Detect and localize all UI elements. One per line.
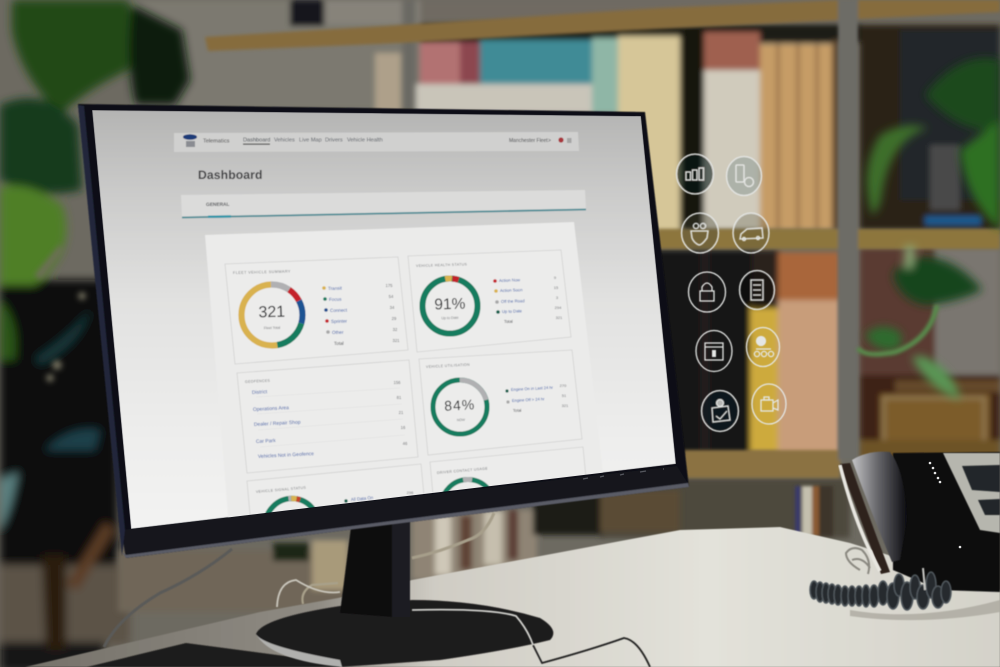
card: geofences: 21 bbox=[399, 410, 404, 415]
legend: 34 bbox=[390, 305, 395, 310]
background: plant specks bbox=[35, 245, 86, 382]
card: vehicle signal status: 296 bbox=[407, 490, 414, 495]
legend: Action Now bbox=[499, 277, 521, 283]
monitor screen: dashboard bbox=[92, 110, 676, 529]
legend: 3 bbox=[556, 295, 559, 300]
card: driver behaviour score: DRIVER CONTACT USAGE bbox=[437, 467, 488, 475]
legend: 321 bbox=[556, 315, 563, 320]
legend: Engine Off > 24 hr bbox=[512, 396, 545, 403]
donut chart: 91% up to date bbox=[422, 278, 478, 334]
legend: 175 bbox=[386, 283, 393, 288]
icon: video camera bbox=[752, 384, 786, 424]
icon: calendar bbox=[696, 330, 732, 372]
legend bbox=[505, 383, 569, 413]
tab bar bbox=[181, 190, 586, 218]
card: driver behaviour score bbox=[430, 446, 586, 493]
legend: Off the Road bbox=[501, 298, 525, 304]
card: vehicle health status: Up to Date bbox=[441, 316, 459, 320]
legend: Total bbox=[513, 408, 522, 413]
card: geofences: 16 bbox=[401, 425, 406, 430]
card: vehicle utilisation bbox=[419, 350, 582, 455]
background: lower wall and items behind the monitor bbox=[118, 490, 680, 612]
floating feature icons bbox=[676, 154, 786, 432]
navigation bar: Dashboard bbox=[243, 138, 270, 144]
legend: Focus bbox=[329, 297, 342, 302]
donut chart: 84% now bbox=[433, 380, 487, 434]
card: vehicle health status: 91% bbox=[434, 296, 466, 313]
navigation bar: Vehicle Health bbox=[347, 138, 383, 144]
icon: lock bbox=[688, 272, 726, 312]
navigation bar: Manchester Fleet bbox=[509, 138, 548, 144]
Ford logo bbox=[183, 134, 197, 140]
legend: 15 bbox=[554, 285, 559, 290]
legend: 294 bbox=[555, 305, 562, 310]
donut chart: 321 fleet total bbox=[242, 284, 302, 346]
legend bbox=[322, 283, 400, 346]
icon: driver badge bbox=[682, 213, 718, 253]
monitor buttons bbox=[583, 469, 664, 479]
cables bbox=[104, 513, 650, 667]
card: geofences: 81 bbox=[397, 395, 402, 400]
card: fleet vehicle summary: 321 bbox=[258, 304, 286, 321]
legend: Other bbox=[332, 330, 344, 335]
legend: Up to Date bbox=[502, 308, 523, 314]
background: plant on the right bbox=[865, 58, 1000, 400]
navigation bar: Vehicles bbox=[274, 138, 295, 144]
card: vehicle health status: VEHICLE HEALTH STATUS bbox=[416, 262, 468, 268]
icon: bar chart bbox=[676, 154, 714, 194]
heading: Dashboard bbox=[198, 168, 263, 182]
card: geofences: Operations Area bbox=[253, 405, 289, 413]
donut chart: driver bbox=[442, 476, 490, 492]
background: plant on the left bbox=[0, 0, 190, 667]
card: vehicle utilisation: VEHICLE UTILISATION bbox=[426, 363, 470, 369]
legend: Total bbox=[504, 319, 513, 324]
card: vehicle health status bbox=[408, 250, 571, 352]
card: geofences: District bbox=[252, 389, 268, 396]
icon: map pin bbox=[702, 390, 738, 432]
icon: phone and clock bbox=[726, 156, 762, 196]
icon: network bbox=[746, 328, 780, 366]
telephone coiled cord bbox=[810, 548, 1000, 620]
card: vehicle signal status: VEHICLE SIGNAL STATUS bbox=[256, 486, 307, 494]
monitor bezel bbox=[78, 104, 689, 558]
telephone bbox=[840, 452, 1000, 592]
desk bbox=[25, 527, 1000, 667]
legend: 32 bbox=[393, 327, 398, 332]
background: plant stem bbox=[858, 305, 937, 354]
navigation bar: Telematics bbox=[203, 139, 230, 145]
legend: 51 bbox=[562, 393, 567, 398]
legend: 54 bbox=[389, 294, 394, 299]
legend: Connect bbox=[330, 308, 348, 313]
navigation bar bbox=[174, 132, 579, 152]
legend: Total bbox=[334, 341, 344, 346]
card: geofences: Car Park bbox=[256, 438, 276, 445]
legend: 29 bbox=[392, 316, 397, 321]
dashboard content panel bbox=[205, 222, 604, 540]
navigation bar: Drivers bbox=[325, 138, 343, 144]
card: fleet vehicle summary bbox=[225, 257, 408, 364]
legend bbox=[493, 275, 563, 324]
monitor stand bbox=[256, 520, 553, 667]
legend: 9 bbox=[554, 275, 557, 280]
legend: Sprinter bbox=[331, 319, 348, 324]
legend: Action Soon bbox=[500, 287, 523, 293]
legend: Engine On in Last 24 hr bbox=[511, 385, 554, 392]
card: vehicle signal status bbox=[246, 464, 424, 515]
legend: 321 bbox=[562, 403, 569, 408]
legend: 270 bbox=[560, 383, 567, 388]
card: geofences: Vehicles Not in Geofence bbox=[258, 451, 314, 460]
background: shelf boards and uprights bbox=[205, 0, 1000, 536]
card: vehicle utilisation: 84% bbox=[444, 396, 476, 414]
card: geofences: Dealer / Repair Shop bbox=[254, 420, 301, 428]
card: fleet vehicle summary: Fleet Total bbox=[264, 326, 280, 330]
card: geofences: 156 bbox=[394, 380, 401, 385]
legend: 321 bbox=[392, 338, 400, 343]
card: vehicle utilisation: NOW bbox=[457, 418, 466, 422]
donut chart: signal bbox=[264, 495, 316, 513]
icon: van bbox=[733, 213, 769, 253]
card: fleet vehicle summary: FLEET VEHICLE SUMMARY bbox=[233, 269, 291, 275]
tab bar: GENERAL bbox=[206, 202, 230, 208]
legend: Transit bbox=[328, 286, 343, 291]
navigation bar: > bbox=[548, 138, 551, 144]
navigation bar: Live Map bbox=[299, 138, 322, 144]
icon: document list bbox=[740, 270, 774, 310]
background: bookshelf with books bbox=[130, 0, 1000, 538]
card: geofences: 46 bbox=[403, 441, 408, 446]
card: vehicle signal status: All Data On bbox=[351, 495, 374, 502]
card: geofences bbox=[237, 360, 418, 473]
card: geofences: GEOFENCES bbox=[245, 379, 271, 384]
laptop edge on the desk bbox=[87, 643, 340, 667]
